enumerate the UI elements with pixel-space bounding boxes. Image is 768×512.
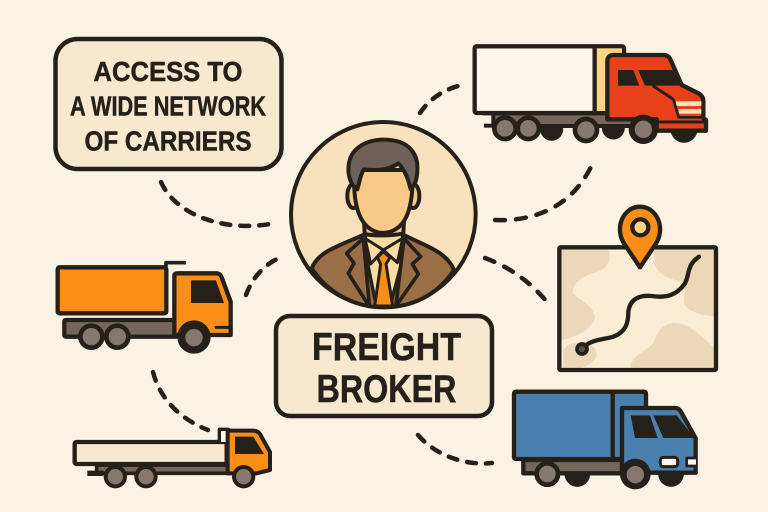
route start point	[577, 344, 587, 354]
broker portrait	[291, 122, 476, 307]
hair	[348, 140, 417, 189]
dashed connector: orange truck to flatbed truck	[153, 372, 208, 430]
icon: red truck	[475, 46, 706, 144]
icon: orange truck	[58, 263, 231, 354]
route	[582, 257, 699, 349]
dashed connector: broker to orange truck	[246, 257, 282, 295]
collar points	[365, 238, 403, 264]
label: freight broker: FREIGHT	[312, 326, 461, 369]
callout: access to carriers	[56, 39, 282, 169]
map pin	[620, 207, 660, 267]
ears	[347, 184, 359, 208]
label: freight broker: BROKER	[316, 368, 456, 411]
dashed connector: broker to blue truck	[418, 435, 492, 463]
label: freight broker	[276, 316, 492, 416]
callout: access to carriers: OF CARRIERS	[84, 126, 252, 156]
dashed connector: broker to red truck	[420, 85, 462, 113]
tie	[375, 252, 393, 306]
neck and face	[364, 220, 404, 235]
callout: access to carriers: A WIDE NETWORK	[70, 90, 266, 122]
lapels	[347, 238, 421, 305]
icon: flatbed truck	[75, 429, 270, 486]
dashed connector: broker to map route	[495, 160, 594, 220]
callout: access to carriers: ACCESS TO	[94, 56, 242, 87]
shirt collar	[365, 233, 403, 300]
map with pin	[559, 207, 716, 370]
icon: blue truck	[514, 392, 696, 489]
map border	[559, 247, 716, 370]
suit	[312, 235, 454, 307]
dashed connector: broker to map	[485, 258, 547, 302]
dashed connector: callout to broker	[161, 182, 270, 226]
map terrain	[561, 249, 610, 340]
